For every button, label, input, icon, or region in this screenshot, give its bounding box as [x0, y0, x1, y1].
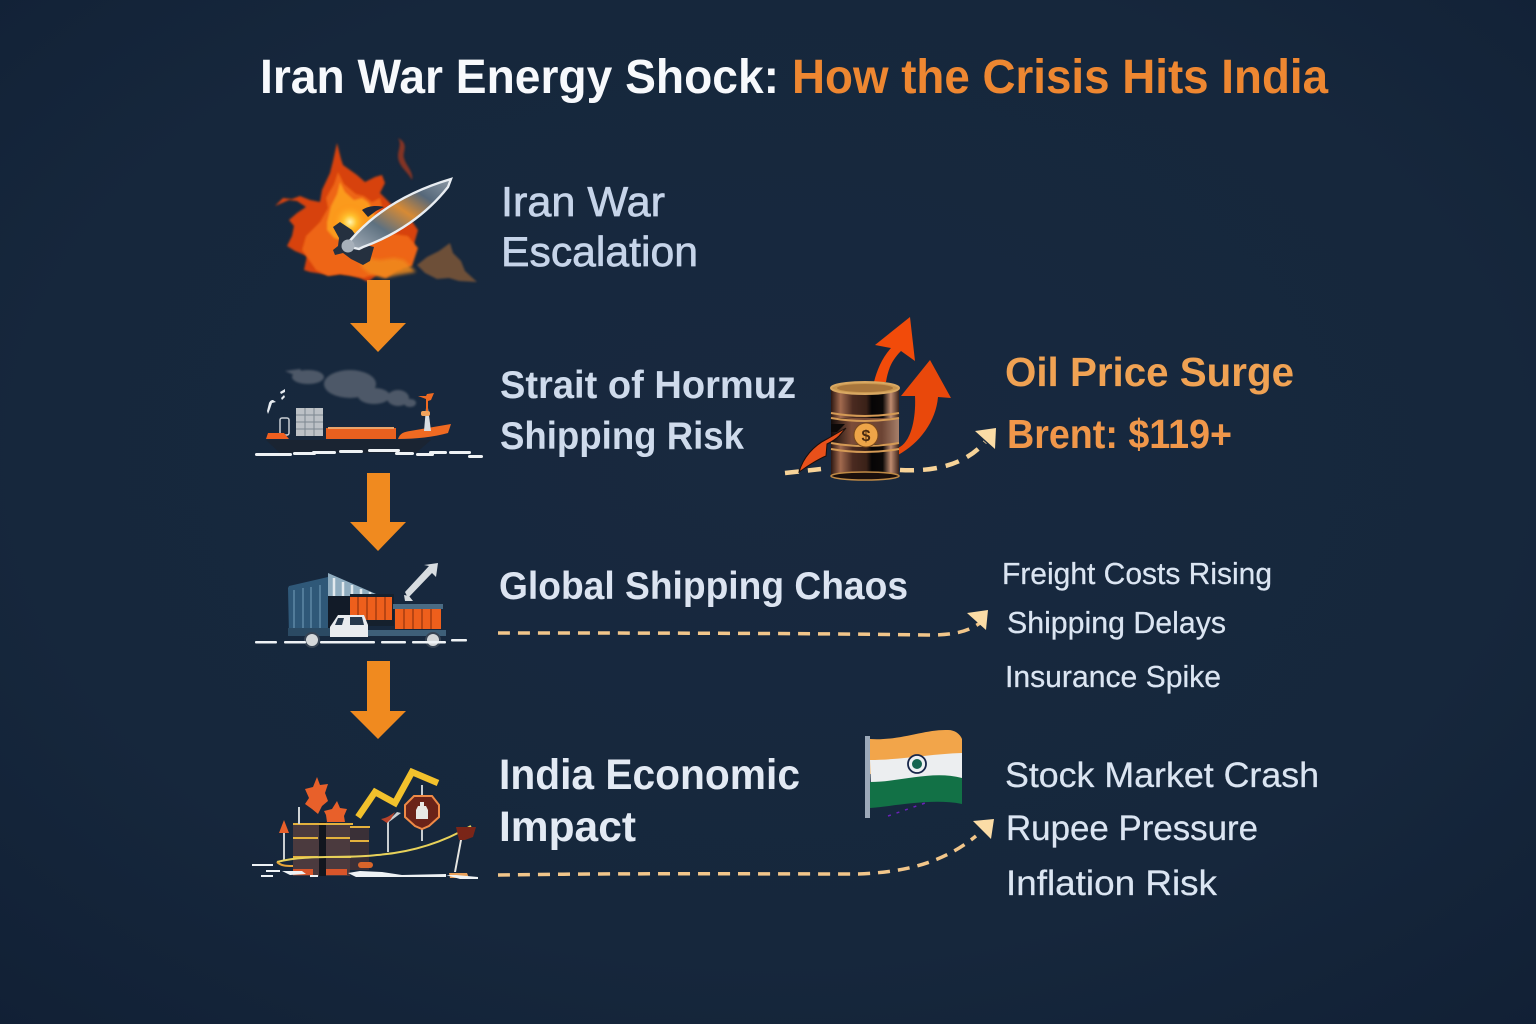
- icon: india economic impact: [252, 772, 478, 879]
- text list: freight effects: Shipping Delays: [1007, 605, 1226, 640]
- text list: freight effects: Insurance Spike: [1005, 659, 1221, 694]
- text: Strait of Hormuz Shipping Risk: [500, 364, 796, 458]
- title: [260, 51, 1328, 104]
- arrow: war to hormuz: [350, 280, 406, 352]
- text: Oil Price Surge: Oil Price Surge: [1005, 349, 1294, 395]
- text: India Economic Impact: Impact: [499, 803, 636, 851]
- text list: freight effects: Freight Costs Rising: [1002, 556, 1272, 591]
- arrow: shipping to india: [350, 661, 406, 739]
- text list: india effects: Rupee Pressure: [1006, 809, 1258, 848]
- icon: container truck: [255, 563, 467, 647]
- icon: india flag: [865, 730, 962, 818]
- text: India Economic Impact: [499, 751, 800, 851]
- text list: india effects: Inflation Risk: [1006, 864, 1218, 903]
- icon: oil barrel with rising arrows: $: [862, 428, 871, 445]
- icon: burning missile: [275, 138, 477, 282]
- title: Iran War Energy Shock:: [260, 51, 779, 104]
- text list: india effects: [1005, 756, 1319, 903]
- title: How the Crisis Hits India: [792, 51, 1328, 104]
- dashed arrow: shipping to effects: [498, 610, 988, 635]
- text: India Economic Impact: India Economic: [499, 751, 800, 799]
- text: Strait of Hormuz Shipping Risk: Shipping Risk: [500, 415, 744, 458]
- text: Brent price: Brent: $119+: [1007, 411, 1232, 457]
- text: Iran War Escalation: [501, 178, 698, 275]
- arrow: hormuz to shipping: [350, 473, 406, 551]
- text: Strait of Hormuz Shipping Risk: Strait of Hormuz: [500, 364, 796, 407]
- dashed arrow: india to market effects: [498, 819, 994, 875]
- text: Iran War Escalation: Iran War: [501, 178, 665, 225]
- dashed arrow: barrel to oil price: [785, 428, 996, 473]
- missile body: [342, 179, 451, 252]
- icon: cargo ship: [255, 369, 483, 458]
- text: Global Shipping Chaos: Global Shipping Chaos: [499, 565, 908, 608]
- icon: oil barrel with rising arrows: [785, 317, 996, 480]
- text: Iran War Escalation: Escalation: [501, 228, 698, 275]
- text list: india effects: Stock Market Crash: [1005, 756, 1319, 795]
- text list: freight effects: [1002, 556, 1272, 694]
